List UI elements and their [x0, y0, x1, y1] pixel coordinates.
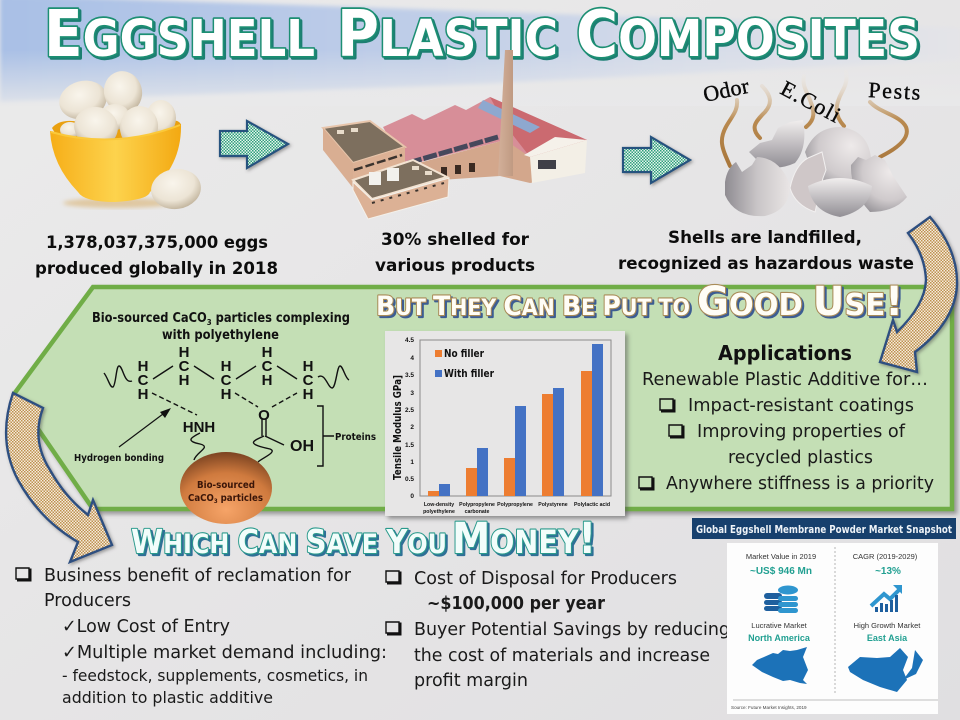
- y axis ticks: 4.5: [405, 337, 414, 344]
- hydrogen bonding label: Hydrogen bonding: [74, 453, 164, 464]
- text block: business benefits: [16, 565, 387, 707]
- left shell: [725, 157, 790, 216]
- y axis ticks: [405, 337, 414, 500]
- category labels: Polypropylene: [497, 502, 533, 508]
- caption: eggs produced: produced globally in 2018: [35, 259, 278, 279]
- market snapshot: [692, 518, 956, 714]
- text block: business benefits: ✓Multiple market demand including:: [62, 642, 387, 663]
- bio-sourced particle: Bio-sourced: [197, 480, 255, 491]
- legend: No filler: [444, 348, 485, 360]
- category labels: carbonate: [465, 509, 490, 515]
- source note: Source: Future Market Insights, 2019: [731, 705, 807, 710]
- caption: landfilled shells: [618, 228, 914, 274]
- title: [44, 0, 920, 72]
- molecule heading: [92, 311, 350, 343]
- heading: but they can be put to good use: BUT THEY CAN BE PUT TO: [376, 291, 690, 322]
- title: EGGSHELL: [44, 0, 315, 72]
- y axis ticks: 2.5: [405, 407, 414, 414]
- applications text: [639, 341, 934, 494]
- heading: which can save you money: [131, 514, 596, 564]
- right shell: [851, 155, 907, 212]
- molecule diagram: OH: [290, 438, 314, 455]
- high growth market: [854, 621, 921, 643]
- polymer chain atoms: C: [179, 358, 190, 375]
- y axis ticks: 4: [410, 355, 414, 362]
- caption: shelled share: [375, 230, 535, 276]
- CAGR stat: CAGR (2019-2029): [853, 552, 918, 561]
- y axis ticks: 3.5: [405, 372, 414, 379]
- panel: green uses panel: [14, 287, 952, 509]
- polymer chain atoms: C: [262, 358, 273, 375]
- text block: savings: the cost of materials and increase: [414, 645, 710, 666]
- bio-sourced particle: CaCO: [188, 493, 216, 504]
- item: recycled plastics: Improving properties of: [697, 421, 906, 442]
- bars: no filler: [428, 371, 592, 496]
- text block: savings: Buyer Potential Savings by reducing: [414, 619, 730, 640]
- applications intro: Renewable Plastic Additive for…: [642, 369, 928, 390]
- y axis ticks: 0: [410, 493, 414, 500]
- item: recycled plastics: recycled plastics: [728, 447, 873, 468]
- text block: savings: profit margin: [414, 670, 528, 691]
- category labels: polyethylene: [423, 509, 455, 515]
- icon: factory: [323, 50, 587, 219]
- arrow: curved bottom left: [6, 393, 112, 562]
- lucrative market: [748, 621, 811, 643]
- polymer chain atoms: H: [303, 386, 313, 403]
- y axis ticks: 1: [410, 459, 414, 466]
- polymer chain atoms: H: [262, 372, 272, 389]
- category labels: Polylactic acid: [574, 502, 610, 508]
- back shell: [805, 127, 871, 190]
- CAGR stat: [853, 552, 918, 577]
- blue title band: [0, 0, 960, 106]
- polymer chain atoms: H: [262, 344, 272, 361]
- y axis ticks: 0.5: [405, 476, 414, 483]
- y axis title: Tensile Modulus GPa]: [392, 375, 404, 480]
- plot frame: [420, 340, 611, 496]
- arrow: factory to shells: [623, 137, 690, 183]
- lower bowl shell: [808, 178, 872, 217]
- molecule diagram: [74, 344, 376, 466]
- snapshot header: [692, 518, 956, 539]
- caption: shelled share: 30% shelled for: [381, 230, 530, 250]
- polymer chain atoms: [138, 344, 314, 403]
- market value stat: Market Value in 2019: [746, 552, 816, 561]
- molecule diagram: O: [258, 407, 270, 424]
- icon: bowl of eggs: [50, 67, 204, 212]
- item: recycled plastics: [669, 421, 906, 468]
- bar chart: tensile modulus: [385, 331, 625, 516]
- map: East Asia: [848, 648, 923, 692]
- market value stat: ~US$ 946 Mn: [750, 566, 812, 577]
- factory main building: [383, 97, 587, 183]
- bars: with filler: [439, 344, 603, 496]
- icon: coin stacks: [764, 586, 798, 613]
- category labels: Low-density: [424, 502, 454, 508]
- title: PLASTIC: [337, 0, 558, 72]
- polymer chain atoms: H: [138, 386, 148, 403]
- heading: which can save you money: MONEY!: [452, 514, 596, 564]
- text block: business benefits: Business benefit of reclamation for: [44, 565, 352, 586]
- text block: business benefits: addition to plastic additive: [62, 688, 273, 707]
- polymer chain atoms: H: [179, 344, 189, 361]
- hydrogen bond arrow: [119, 408, 171, 447]
- caption: landfilled shells: recognized as hazardous waste: [618, 254, 914, 274]
- applications heading: Applications: [718, 341, 852, 365]
- polymer chain atoms: H: [221, 358, 231, 375]
- molecule heading: particles complexing: [212, 311, 350, 326]
- heading: but they can be put to good use: [376, 279, 903, 325]
- top shell: [749, 120, 804, 168]
- text block: business benefits: Producers: [44, 590, 131, 611]
- factory chimney: [498, 50, 513, 176]
- heading: which can save you money: WHICH CAN SAVE YOU: [131, 522, 447, 561]
- bio-sourced particle: particles: [218, 493, 263, 504]
- label: E. Coli: E.Coli: [777, 75, 845, 127]
- item: stiffness: Anywhere stiffness is a priority: [666, 473, 934, 494]
- heading: but they can be put to good use: GOOD USE!: [697, 279, 903, 325]
- label: Odor: Odor: [701, 73, 752, 107]
- polymer chain atoms: H: [303, 358, 313, 375]
- text block: savings: ~$100,000 per year: [427, 593, 605, 614]
- legend: With filler: [444, 368, 495, 380]
- high growth market: East Asia: [867, 633, 908, 643]
- factory lower block: [353, 160, 449, 219]
- caption: eggs produced: 1,378,037,375,000 eggs: [46, 233, 268, 253]
- caption: shelled share: various products: [375, 256, 535, 276]
- chart card: [385, 331, 625, 516]
- y axis ticks: 1.5: [405, 442, 414, 449]
- high growth market: High Growth Market: [854, 621, 921, 630]
- category labels: Polypropylene: [459, 502, 495, 508]
- CAGR stat: ~13%: [875, 566, 901, 577]
- snapshot card: [727, 543, 938, 714]
- text block: business benefits: - feedstock, supplements, cosmetics, in: [62, 666, 368, 685]
- title: COMPOSITES: [576, 0, 920, 72]
- fumes: [722, 72, 907, 166]
- icon: broken eggshells with fumes: [722, 72, 907, 217]
- proteins label: Proteins: [335, 432, 376, 443]
- item: coatings: Impact-resistant coatings: [688, 395, 914, 416]
- caption: eggs produced: [35, 233, 278, 279]
- map: North America: [752, 647, 808, 684]
- caption: landfilled shells: Shells are landfilled,: [668, 228, 862, 248]
- polymer chain atoms: H: [179, 372, 189, 389]
- polymer chain atoms: H: [138, 358, 148, 375]
- market value stat: [746, 552, 816, 577]
- legend: [435, 348, 495, 380]
- label: Pests: Pests: [868, 77, 921, 105]
- atom labels: HNH: [183, 419, 215, 436]
- arrow: curved top right: [880, 217, 957, 372]
- text block: savings: Cost of Disposal for Producers: [414, 568, 677, 589]
- category labels: [423, 502, 610, 515]
- bio-sourced particle: 3: [214, 498, 218, 505]
- chain bonds: [104, 366, 349, 466]
- middle shell: [790, 152, 826, 212]
- polymer chain atoms: H: [221, 386, 231, 403]
- y axis ticks: 2: [410, 424, 414, 431]
- text block: savings: [386, 568, 730, 691]
- factory left block: [323, 121, 405, 188]
- polymer chain atoms: C: [138, 372, 149, 389]
- y axis ticks: 3: [410, 390, 414, 397]
- icon: growth chart: [871, 585, 902, 612]
- bio-sourced particle: [180, 452, 272, 524]
- molecule heading: Bio-sourced CaCO: [92, 311, 222, 326]
- category labels: Polystyrene: [538, 502, 568, 508]
- molecule heading: with polyethylene: [162, 328, 279, 343]
- polymer chain atoms: C: [303, 372, 314, 389]
- arrow: eggs to factory: [220, 121, 288, 168]
- lucrative market: Lucrative Market: [751, 621, 808, 630]
- polymer chain atoms: C: [221, 372, 232, 389]
- lucrative market: North America: [748, 633, 811, 643]
- text block: business benefits: ✓Low Cost of Entry: [62, 616, 230, 637]
- molecule heading: 3: [207, 318, 212, 327]
